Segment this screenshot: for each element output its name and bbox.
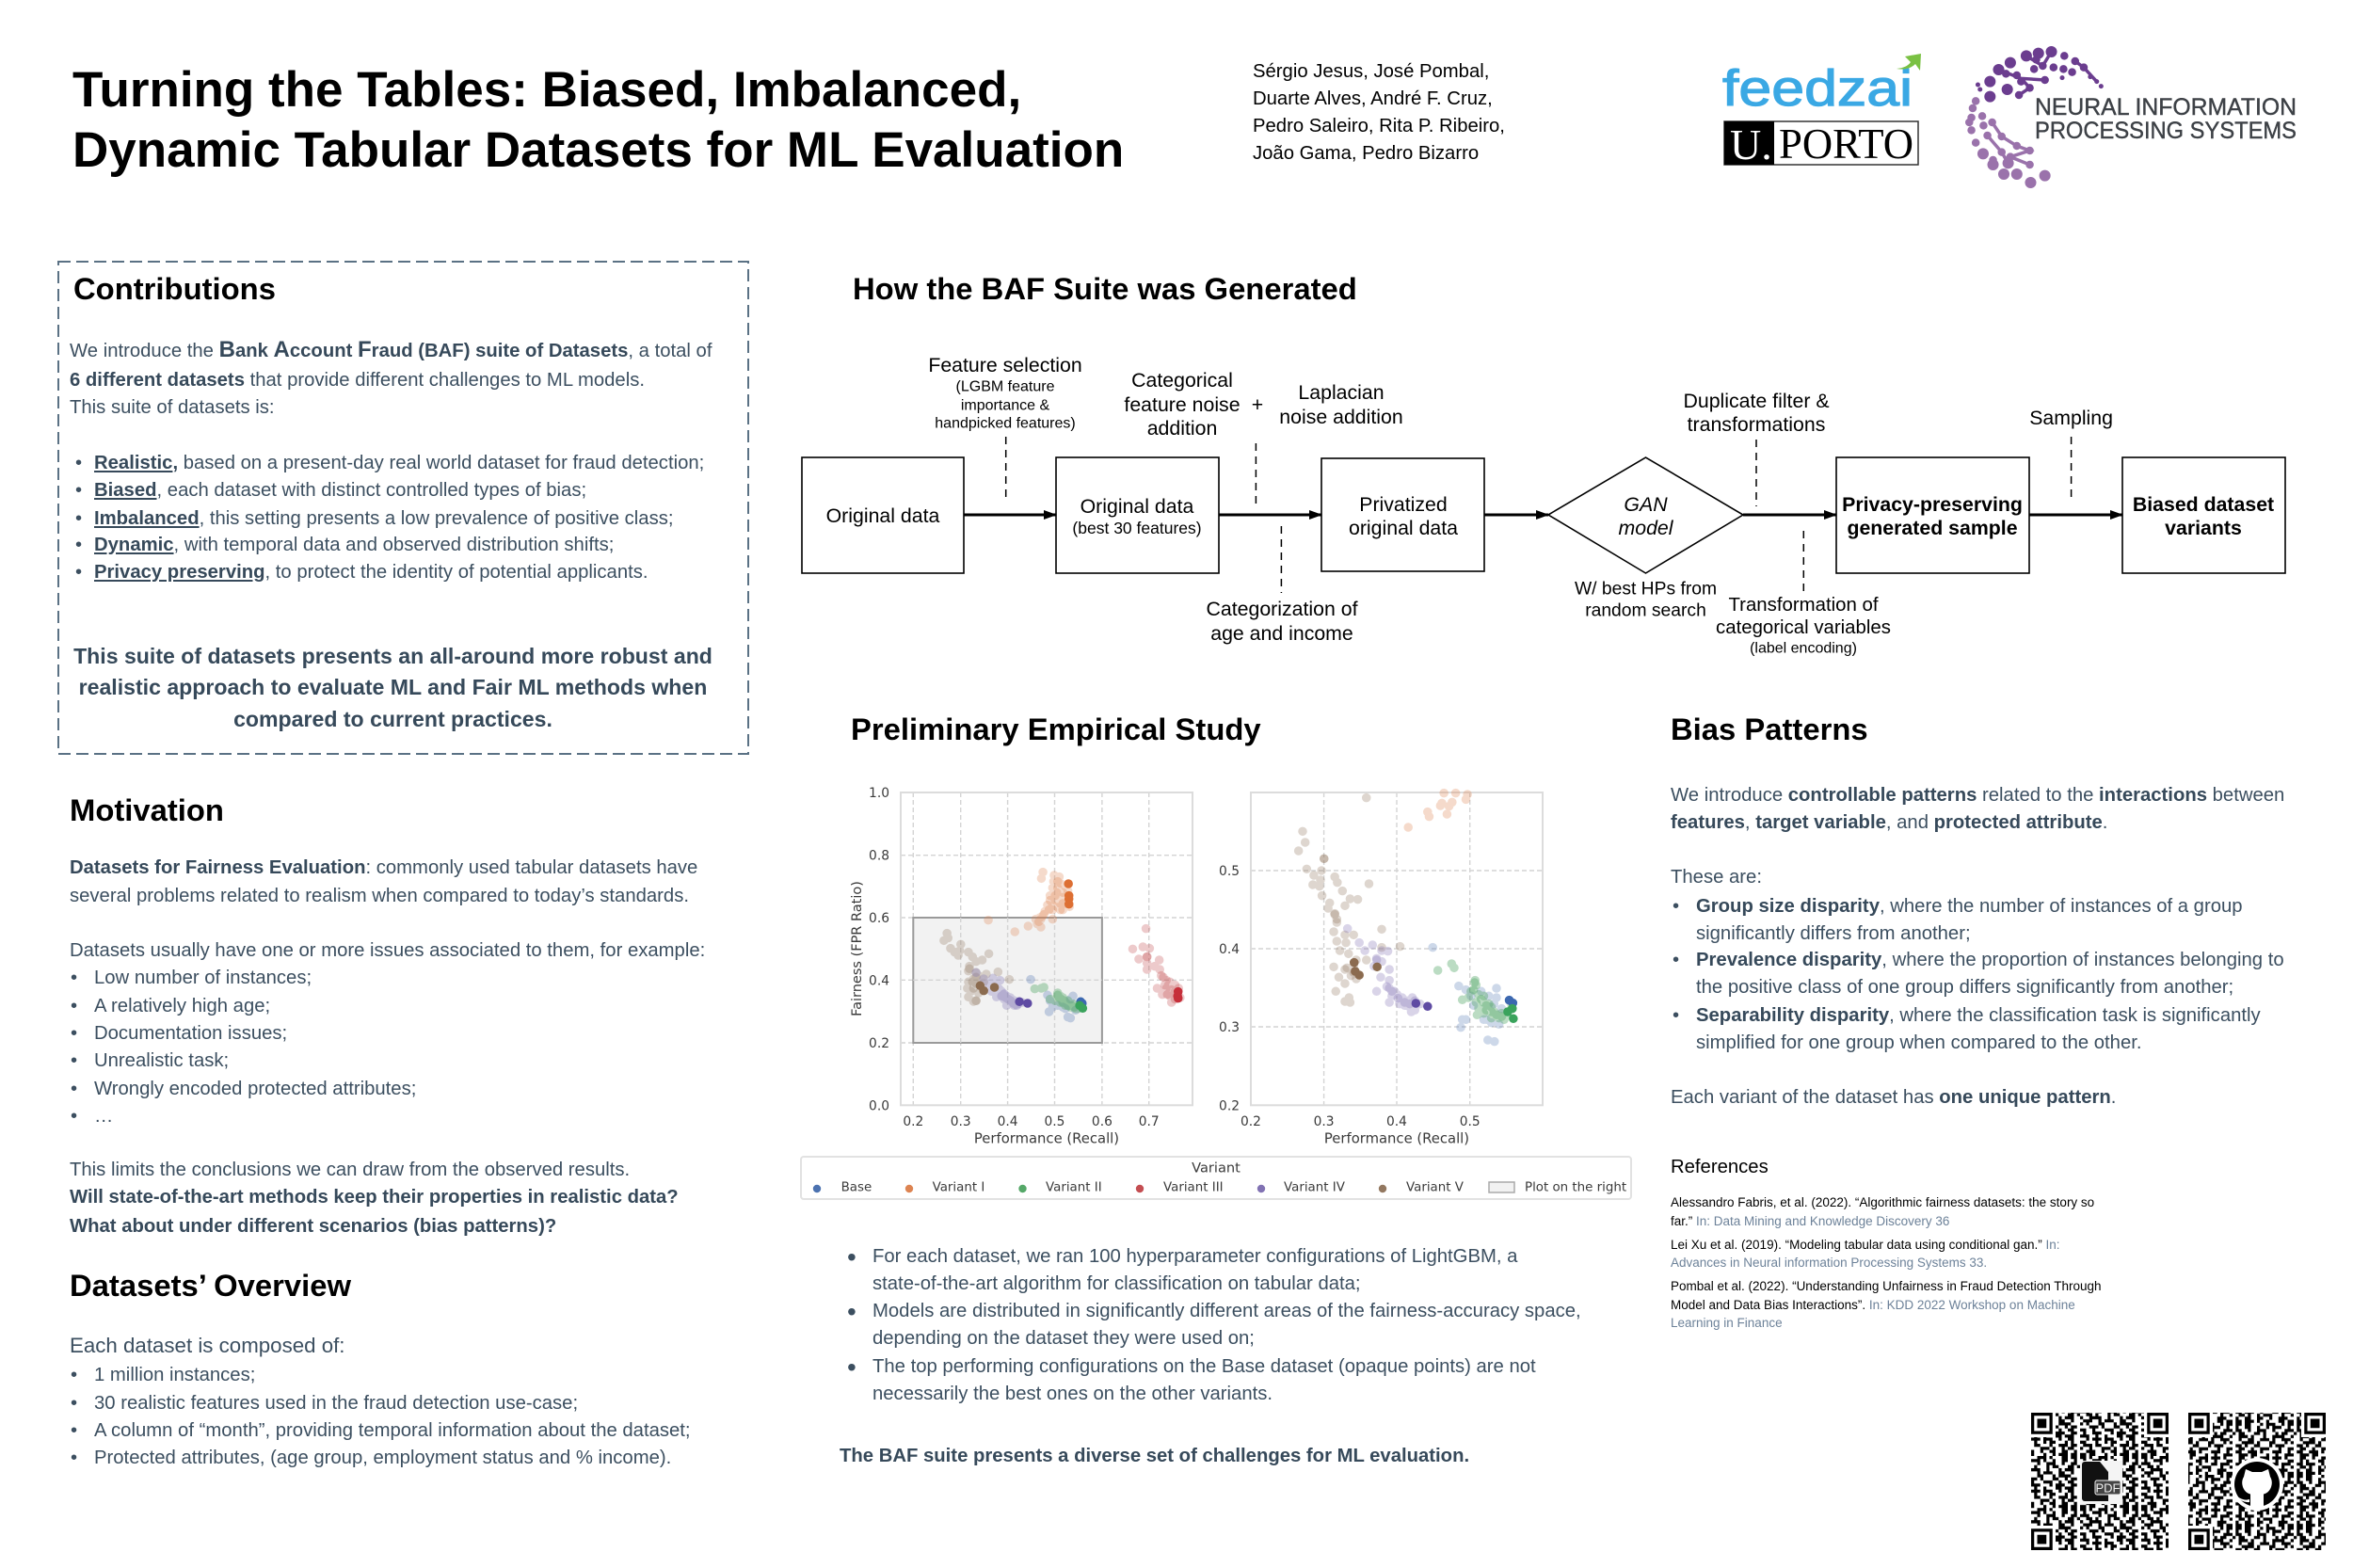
text: overview body: A column of “month”, providing temporal information about the dataset; <box>94 1420 691 1441</box>
list: findings: • <box>847 1297 856 1326</box>
authors: Pedro Saleiro, Rita P. Ribeiro, <box>1253 116 1505 136</box>
list: findings: necessarily the best ones on the other variants. <box>872 1384 1273 1404</box>
box labels: generated sample <box>1847 517 2018 539</box>
heading: motivation: Motivation <box>70 792 224 827</box>
text: bias patterns body: Separability disparity, where the classification task is significantly <box>1696 1005 2261 1026</box>
list: findings <box>847 1242 1581 1404</box>
reference list: Lei Xu et al. (2019). “Modeling tabular data using conditional gan.” In: <box>1671 1238 2060 1252</box>
logo: NeurIPS <box>1965 46 2297 188</box>
step annotations: categorical variables <box>1716 617 1891 638</box>
callout: takeaway: The BAF suite presents a diverse set of challenges for ML evaluation. <box>840 1446 1469 1466</box>
step annotations: random search <box>1585 600 1706 621</box>
text: motivation body: • <box>71 1106 77 1127</box>
scatter charts and legend <box>800 786 1632 1200</box>
legend: Variant IV <box>1284 1180 1346 1195</box>
list: dataset properties <box>75 453 704 583</box>
box labels: model <box>1618 517 1674 539</box>
text: bias patterns body: We introduce controllable patterns related to the interactions between <box>1671 785 2284 806</box>
logo: feedzai: feedzai <box>1722 60 1913 117</box>
text: bias patterns body: • <box>1673 950 1679 970</box>
chart: fairness vs performance overview: 0.5 <box>1045 1114 1064 1129</box>
text: motivation body: Wrongly encoded protected attributes; <box>94 1079 416 1099</box>
text: bias patterns body: Prevalence disparity, where the proportion of instances belonging to <box>1696 950 2284 970</box>
callout: conclusion <box>73 644 712 731</box>
heading: contributions: Contributions <box>73 271 276 306</box>
legend: Variant I <box>933 1180 984 1195</box>
list: dataset properties: Privacy preserving, to protect the identity of potential applicants. <box>94 562 648 583</box>
text: introduction: This suite of datasets is: <box>70 397 275 418</box>
reference list: Learning in Finance <box>1671 1316 1783 1330</box>
list: dataset properties: • <box>75 508 82 529</box>
chart: zoomed plot on the right: 0.4 <box>1219 942 1240 957</box>
text: motivation body: A relatively high age; <box>94 996 270 1016</box>
chart: fairness vs performance overview: 0.6 <box>869 911 889 926</box>
text: bias patterns body: simplified for one group when compared to the other. <box>1696 1032 2142 1053</box>
QR code: PDF link <box>2028 1410 2171 1553</box>
box labels: Biased dataset <box>2133 493 2274 516</box>
text: overview body: • <box>71 1448 77 1468</box>
text: bias patterns body: These are: <box>1671 867 1762 888</box>
legend <box>801 1157 1631 1199</box>
chart: zoomed plot on the right <box>1219 792 1543 1146</box>
text: overview body: • <box>71 1365 77 1385</box>
box labels: GAN <box>1624 493 1668 516</box>
step annotations: W/ best HPs from <box>1575 580 1717 599</box>
step annotations: Categorization of <box>1206 598 1358 620</box>
text: bias patterns body <box>1671 785 2284 1108</box>
chart: fairness vs performance overview: 0.2 <box>869 1036 889 1051</box>
step annotations: Transformation of <box>1728 595 1879 616</box>
chart: fairness vs performance overview: 0.3 <box>951 1114 971 1129</box>
logo: NeurIPS: PROCESSING SYSTEMS <box>2035 118 2297 144</box>
step annotations: (LGBM feature <box>956 378 1055 395</box>
QR codes <box>2031 1413 2326 1550</box>
chart: fairness vs performance overview: 0.8 <box>869 849 889 864</box>
step annotations: age and income <box>1210 622 1353 645</box>
text: overview body: Each dataset is composed of: <box>70 1334 345 1357</box>
reference list: far.” In: Data Mining and Knowledge Discovery 36 <box>1671 1214 1949 1228</box>
text: introduction <box>70 337 712 418</box>
text: motivation body: Documentation issues; <box>94 1023 287 1044</box>
chart: fairness vs performance overview: 1.0 <box>869 786 889 801</box>
text: motivation body: Datasets for Fairness Evaluation: commonly used tabular datasets have <box>70 857 697 878</box>
chart: fairness vs performance overview <box>850 786 1193 1146</box>
legend: Variant III <box>1163 1180 1224 1195</box>
text: motivation body: several problems related to realism when compared to today’s standards. <box>70 886 689 906</box>
step annotations: (label encoding) <box>1750 640 1857 657</box>
text: bias patterns body: Each variant of the dataset has one unique pattern. <box>1671 1087 2116 1108</box>
list: findings: • <box>847 1352 856 1382</box>
step annotations: Categorical <box>1131 369 1233 392</box>
panel: datasets overview <box>70 1268 691 1468</box>
text: overview body: Protected attributes, (age group, employment status and % income). <box>94 1448 671 1468</box>
logo: U.Porto: PORTO <box>1779 120 1913 167</box>
list: dataset properties: • <box>75 453 82 473</box>
heading: generation: How the BAF Suite was Generated <box>853 271 1357 306</box>
step annotations: Sampling <box>2029 407 2113 429</box>
list: findings: state-of-the-art algorithm for classification on tabular data; <box>872 1273 1361 1294</box>
list: dataset properties: • <box>75 562 82 583</box>
box labels: Original data <box>826 504 940 527</box>
flowchart <box>801 354 2286 657</box>
chart: zoomed plot on the right: 0.3 <box>1314 1114 1335 1129</box>
box labels: variants <box>2165 517 2242 539</box>
panel: preliminary empirical study <box>800 712 1632 1466</box>
authors: João Gama, Pedro Bizarro <box>1253 143 1479 164</box>
step annotations: handpicked features) <box>935 416 1076 431</box>
text: introduction: 6 different datasets that provide different challenges to ML models. <box>70 370 645 391</box>
chart: fairness vs performance overview: 0.0 <box>869 1098 889 1113</box>
chart: fairness vs performance overview: Fairness (FPR Ratio) <box>850 881 865 1016</box>
step annotations: Laplacian <box>1298 381 1385 404</box>
authors: Duarte Alves, André F. Cruz, <box>1253 88 1493 109</box>
chart: zoomed plot on the right: Performance (Recall) <box>1324 1131 1469 1146</box>
chart: fairness vs performance overview: 0.4 <box>869 973 889 988</box>
icon: neural dots <box>1969 52 2101 183</box>
step annotations: Duplicate filter & <box>1683 390 1830 412</box>
heading: datasets overview: Datasets’ Overview <box>70 1268 351 1303</box>
chart: fairness vs performance overview: 0.4 <box>998 1114 1018 1129</box>
points: left chart <box>944 872 1180 1018</box>
box labels <box>826 493 2274 539</box>
step annotations: + <box>1252 393 1263 416</box>
list: dataset properties: • <box>75 535 82 555</box>
arrows <box>964 514 2122 516</box>
step annotations: transformations <box>1688 413 1825 436</box>
box labels: original data <box>1349 517 1458 539</box>
QR code: PDF link: PDF <box>2095 1481 2121 1495</box>
text: motivation body: Unrealistic task; <box>94 1050 229 1071</box>
list: dataset properties: Imbalanced, this setting presents a low prevalence of positive class; <box>94 508 674 529</box>
points: right chart <box>1299 793 1513 1042</box>
panel: motivation <box>70 792 705 1237</box>
list: findings: The top performing configurations on the Base dataset (opaque points) are not <box>872 1356 1536 1377</box>
chart: fairness vs performance overview: 0.7 <box>1139 1114 1160 1129</box>
list: findings: • <box>847 1242 856 1272</box>
text: bias patterns body: • <box>1673 896 1679 917</box>
legend: Plot on the right <box>1525 1180 1626 1195</box>
text: bias patterns body: features, target variable, and protected attribute. <box>1671 812 2107 833</box>
text: overview body: 1 million instances; <box>94 1365 255 1385</box>
title <box>72 62 1124 178</box>
callout: conclusion: realistic approach to evaluate ML and Fair ML methods when <box>79 675 707 699</box>
text: motivation body: • <box>71 1023 77 1044</box>
chart: fairness vs performance overview: Performance (Recall) <box>974 1131 1119 1146</box>
reference list: Alessandro Fabris, et al. (2022). “Algorithmic fairness datasets: the story so <box>1671 1195 2094 1209</box>
panel: references <box>1671 1157 2101 1330</box>
reference list: Pombal et al. (2022). “Understanding Unfairness in Fraud Detection Through <box>1671 1279 2101 1293</box>
text: overview body: • <box>71 1420 77 1441</box>
step annotations: Feature selection <box>928 354 1082 376</box>
text: introduction: We introduce the Bank Account Fraud (BAF) suite of Datasets, a total of <box>70 337 712 362</box>
list: dataset properties: • <box>75 480 82 501</box>
chart: zoomed plot on the right: 0.2 <box>1241 1114 1261 1129</box>
box labels: Privacy-preserving <box>1842 493 2023 516</box>
text: overview body <box>70 1334 691 1468</box>
text: motivation body: Datasets usually have one or more issues associated to them, for example: <box>70 940 705 961</box>
QR code: GitHub link <box>2185 1410 2329 1553</box>
list: dataset properties: Biased, each dataset with distinct controlled types of bias; <box>94 480 586 501</box>
callout: conclusion: This suite of datasets presents an all-around more robust and <box>73 644 712 668</box>
text: motivation body: • <box>71 1079 77 1099</box>
panel: contributions <box>57 261 749 755</box>
legend: Variant V <box>1406 1180 1465 1195</box>
authors: Sérgio Jesus, José Pombal, <box>1253 61 1489 82</box>
chart: fairness vs performance overview: 0.2 <box>903 1114 923 1129</box>
chart: fairness vs performance overview: 0.6 <box>1092 1114 1112 1129</box>
logo: NeurIPS: NEURAL INFORMATION <box>2035 94 2297 120</box>
text: motivation body: Low number of instances; <box>94 968 312 988</box>
reference list: Model and Data Bias Interactions”. In: KDD 2022 Workshop on Machine <box>1671 1298 2075 1312</box>
panel: how the BAF suite was generated <box>801 271 2286 657</box>
step annotations: addition <box>1147 417 1217 440</box>
list: dataset properties: Dynamic, with temporal data and observed distribution shifts; <box>94 535 614 555</box>
step annotations: importance & <box>961 397 1049 414</box>
text: motivation body: • <box>71 968 77 988</box>
process boxes <box>802 457 2285 573</box>
text: bias patterns body: the positive class of one group differs significantly from another; <box>1696 977 2233 998</box>
list: findings: depending on the dataset they were used on; <box>872 1328 1255 1349</box>
dashed step connectors <box>1006 437 2072 594</box>
title: Dynamic Tabular Datasets for ML Evaluation <box>72 122 1124 178</box>
heading: references: References <box>1671 1157 1769 1177</box>
logo: U.Porto <box>1723 120 1919 167</box>
box labels: (best 30 features) <box>1072 519 1202 537</box>
text: bias patterns body: significantly differs from another; <box>1696 923 1971 944</box>
callout: conclusion: compared to current practices. <box>233 707 552 731</box>
text: motivation body: … <box>94 1106 113 1127</box>
box labels: Privatized <box>1359 493 1448 516</box>
legend: Variant II <box>1046 1180 1102 1195</box>
legend: Variant <box>1192 1160 1241 1176</box>
panel: bias patterns <box>1671 712 2284 1108</box>
chart: zoomed plot on the right: 0.3 <box>1219 1020 1240 1035</box>
reference list: Advances in Neural information Processing Systems 33. <box>1671 1256 1987 1270</box>
box labels: Original data <box>1080 495 1194 518</box>
text: motivation body: What about under different scenarios (bias patterns)? <box>70 1216 556 1237</box>
step annotations: feature noise <box>1124 393 1241 416</box>
text: motivation body: • <box>71 1050 77 1071</box>
text: overview body: 30 realistic features used in the fraud detection use-case; <box>94 1393 578 1414</box>
chart: zoomed plot on the right: 0.5 <box>1219 864 1240 879</box>
title: Turning the Tables: Biased, Imbalanced, <box>72 62 1021 118</box>
list: findings: Models are distributed in significantly different areas of the fairness-accuracy space, <box>872 1301 1581 1321</box>
step annotations: noise addition <box>1279 406 1403 428</box>
text: motivation body <box>70 857 705 1237</box>
heading: empirical study: Preliminary Empirical Study <box>851 712 1261 746</box>
authors <box>1253 61 1505 164</box>
text: motivation body: • <box>71 996 77 1016</box>
step annotations <box>928 354 2113 657</box>
heading: bias patterns: Bias Patterns <box>1671 712 1868 746</box>
text: motivation body: This limits the conclusions we can draw from the observed results. <box>70 1160 630 1180</box>
text: bias patterns body: Group size disparity, where the number of instances of a group <box>1696 896 2243 917</box>
chart: zoomed plot on the right: 0.2 <box>1219 1098 1240 1113</box>
text: motivation body: Will state-of-the-art methods keep their properties in realistic data? <box>70 1187 679 1208</box>
legend: Base <box>841 1180 872 1195</box>
list: dataset properties: Realistic, based on a present-day real world dataset for fraud detection; <box>94 453 704 473</box>
list: findings: For each dataset, we ran 100 hyperparameter configurations of LightGBM, a <box>872 1246 1517 1267</box>
text: bias patterns body: • <box>1673 1005 1679 1026</box>
reference list <box>1671 1195 2101 1330</box>
text: overview body: • <box>71 1393 77 1414</box>
chart: zoomed plot on the right: 0.5 <box>1460 1114 1481 1129</box>
chart: zoomed plot on the right: 0.4 <box>1386 1114 1407 1129</box>
